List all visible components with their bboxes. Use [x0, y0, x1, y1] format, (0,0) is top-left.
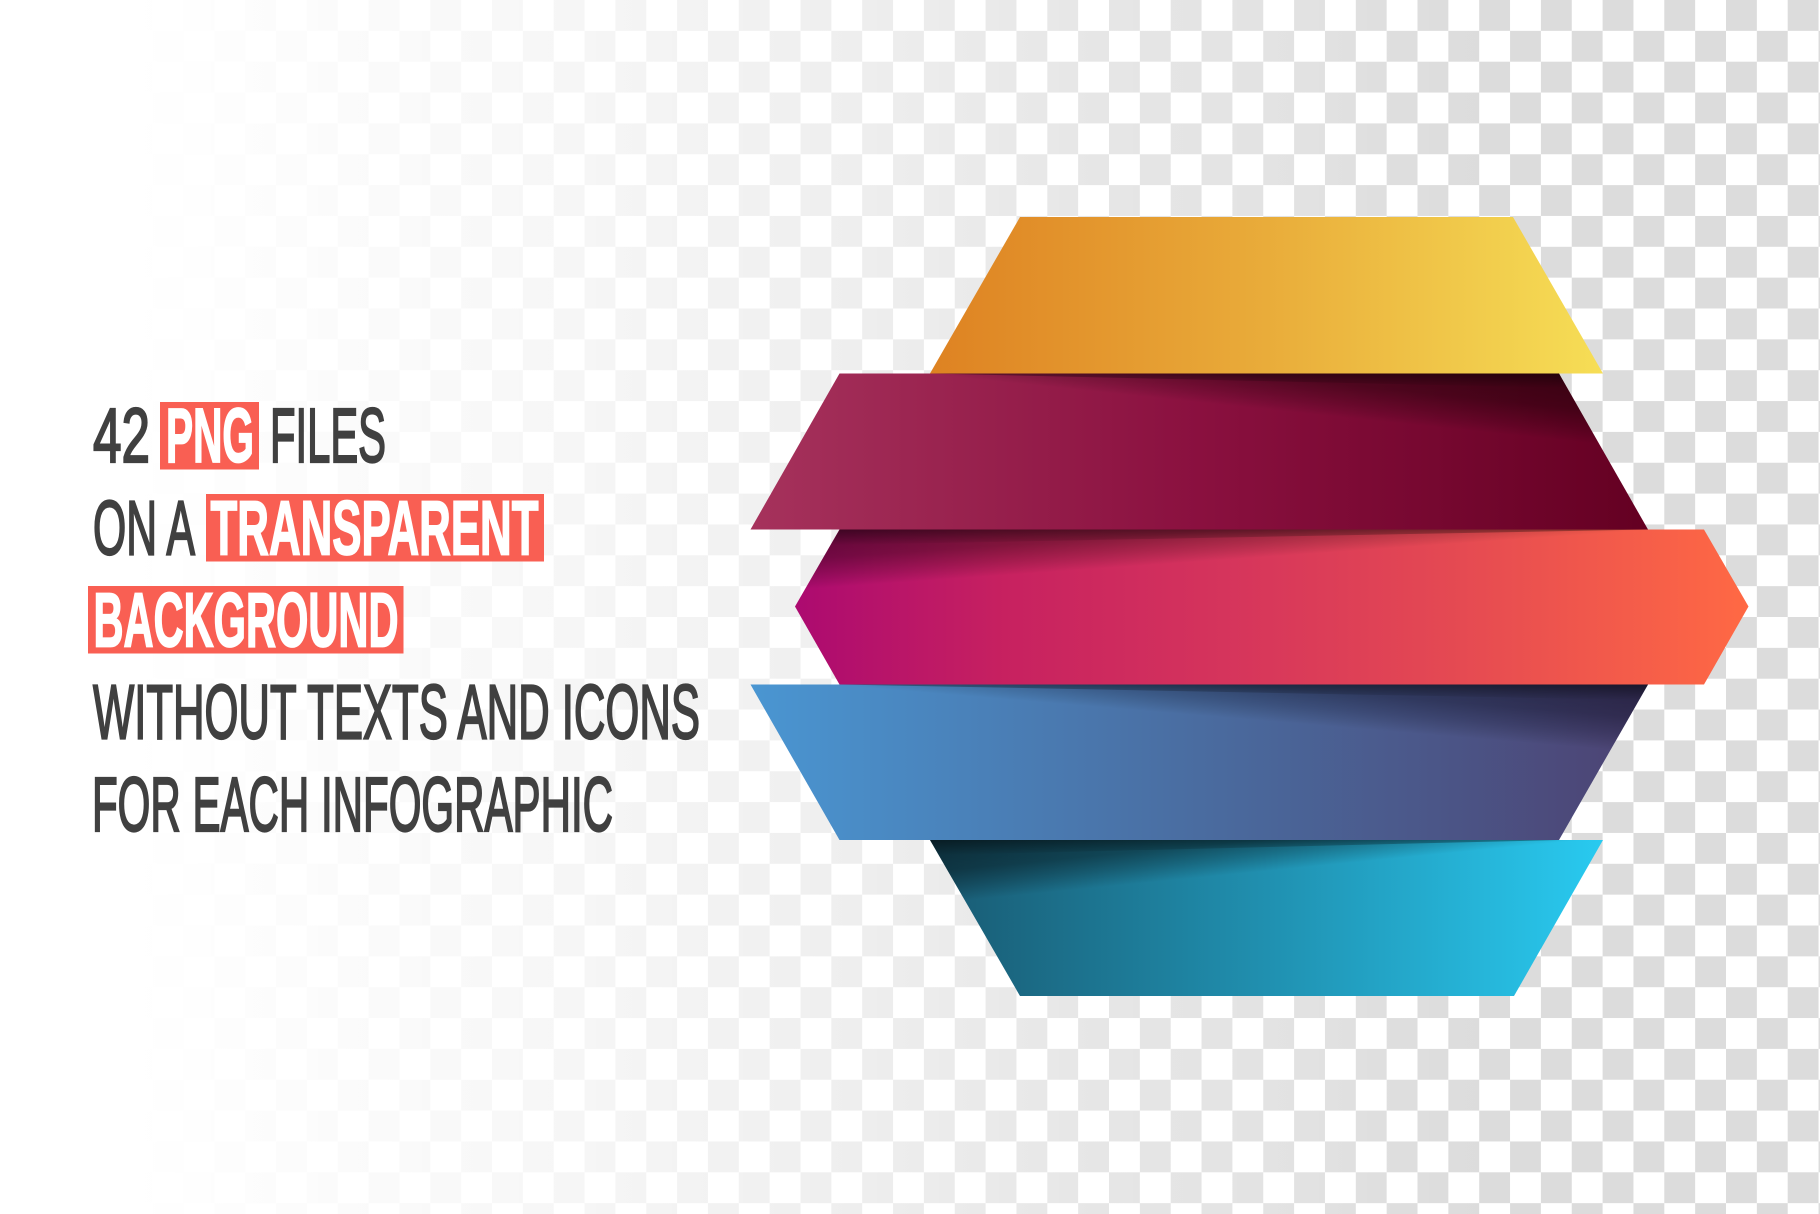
- band 1: yellow trapezoid (top): [930, 217, 1603, 374]
- chart: five-layer hexagon: [750, 217, 1748, 996]
- line 5: FOR EACH INFOGRAPHIC: FOR EACH INFOGRAPHIC: [92, 762, 613, 848]
- line 2: ON A TRANSPARENT: [93, 486, 544, 572]
- line 1: 42 PNG FILES: FILES: [270, 393, 386, 479]
- line 1: 42 PNG FILES: PNG: [166, 393, 254, 479]
- line 4: WITHOUT TEXTS AND ICONS: WITHOUT TEXTS AND ICONS: [93, 670, 700, 756]
- text block: promotional copy: [88, 393, 700, 848]
- band 5: blue trapezoid (bottom): [930, 840, 1603, 996]
- line 1: 42 PNG FILES: [93, 393, 386, 479]
- line 1: 42 PNG FILES: 42: [93, 393, 150, 479]
- line 3: BACKGROUND: [88, 578, 404, 664]
- line 3: BACKGROUND: BACKGROUND: [94, 578, 398, 664]
- line 2: ON A TRANSPARENT: TRANSPARENT: [210, 486, 538, 572]
- band 4: indigo trapezoid: [750, 684, 1648, 840]
- band 2: crimson trapezoid: [750, 374, 1648, 530]
- band 3: coral arrow-ended hexagon band: [795, 530, 1748, 684]
- line 2: ON A TRANSPARENT: ON A: [93, 486, 195, 572]
